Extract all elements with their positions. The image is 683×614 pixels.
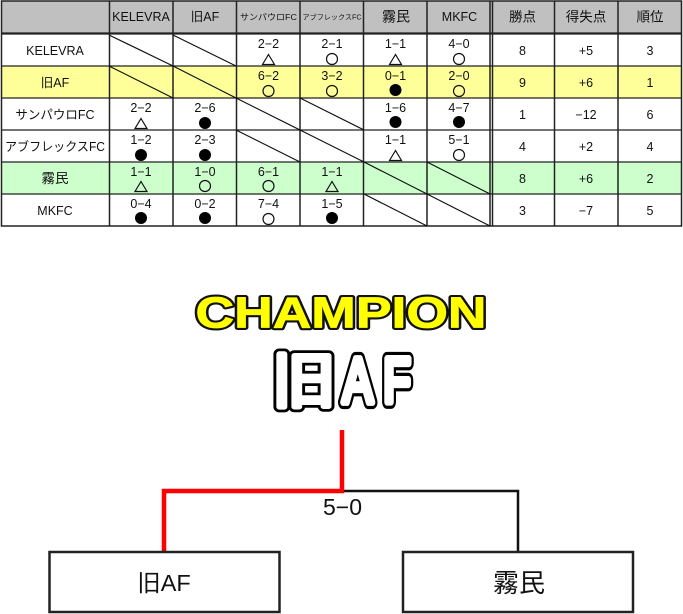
row: 霧民: 1−1 <box>130 165 152 179</box>
row: 霧民: 2 <box>647 172 654 186</box>
league table <box>1 1 682 226</box>
row: サンパウロFC: 1 <box>519 108 526 122</box>
row: サンパウロFC: サンパウロFC <box>15 108 95 122</box>
champion team name: AF <box>343 344 411 416</box>
row: アブフレックスFC: 1−2 <box>130 133 152 147</box>
row: 霧民: 6−1 <box>258 165 279 179</box>
row: MKFC: −7 <box>579 204 593 218</box>
row: MKFC: 0−2 <box>194 197 216 211</box>
row: 霧民: 1−0 <box>194 165 216 179</box>
highlight band: 霧民 row <box>1 162 682 194</box>
row: 霧民: 1−1 <box>321 165 343 179</box>
highlight band: 旧AF row <box>1 66 682 98</box>
row: 旧AF: +6 <box>579 76 593 90</box>
row: MKFC: 1−5 <box>321 197 343 211</box>
table header row: アブフレックスFC <box>302 12 362 22</box>
finalist box: 霧民 <box>403 552 633 612</box>
bracket: losing path <box>342 491 518 552</box>
table header row: MKFC <box>442 10 477 24</box>
row: KELEVRA: 3 <box>647 44 654 58</box>
row: アブフレックスFC <box>5 133 654 161</box>
row: KELEVRA: KELEVRA <box>26 44 84 58</box>
table header row: 旧AF <box>191 10 220 24</box>
row: KELEVRA: 8 <box>519 44 526 58</box>
row: 旧AF <box>41 69 654 96</box>
final score: 5−0 <box>323 494 362 520</box>
diagonal no-match cells <box>109 35 490 226</box>
title: CHAMPION: CHAMPION <box>196 288 486 338</box>
row: 霧民 <box>42 165 654 192</box>
row: MKFC: MKFC <box>37 204 73 218</box>
row: 旧AF: 旧AF <box>41 76 70 90</box>
row: 旧AF: 3−2 <box>321 69 343 83</box>
row: KELEVRA: +5 <box>579 44 593 58</box>
row: KELEVRA: 1−1 <box>385 37 406 51</box>
table header row: サンパウロFC <box>240 12 297 22</box>
table grid lines <box>1 1 682 226</box>
row: アブフレックスFC: 2−3 <box>194 133 216 147</box>
row: MKFC: 3 <box>519 204 526 218</box>
row: アブフレックスFC: 5−1 <box>448 133 470 147</box>
row: 旧AF: 9 <box>519 76 526 90</box>
row: 旧AF: 2−0 <box>448 69 470 83</box>
row: サンパウロFC: 2−6 <box>194 101 216 115</box>
row: MKFC: 7−4 <box>258 197 279 211</box>
row: アブフレックスFC: 1−1 <box>385 133 406 147</box>
finalist box: 旧AF <box>50 552 280 612</box>
title: CHAMPION: CHAMPION <box>196 288 486 338</box>
row: サンパウロFC: −12 <box>575 108 597 122</box>
row: MKFC: 0−4 <box>130 197 152 211</box>
row: 霧民: +6 <box>579 172 593 186</box>
row: 旧AF: 6−2 <box>258 69 279 83</box>
champion team name: 旧 <box>272 349 336 416</box>
row: アブフレックスFC: 4 <box>519 140 526 154</box>
row: アブフレックスFC: +2 <box>579 140 593 154</box>
row: サンパウロFC: 4−7 <box>448 101 470 115</box>
row: KELEVRA: 2−2 <box>258 37 279 51</box>
row: サンパウロFC <box>15 101 654 129</box>
table header row: 勝点 <box>509 10 536 24</box>
champion team name: AF <box>343 344 411 416</box>
row: サンパウロFC: 1−6 <box>385 101 406 115</box>
table header row: KELEVRA <box>112 10 170 24</box>
row: サンパウロFC: 6 <box>647 108 654 122</box>
champion team name: 旧 <box>272 349 336 416</box>
row: KELEVRA <box>26 37 654 64</box>
row: 霧民: 霧民 <box>42 171 69 186</box>
row: サンパウロFC: 2−2 <box>130 101 152 115</box>
row: 霧民: 8 <box>519 172 526 186</box>
champion team name <box>272 344 411 416</box>
bracket: winning path <box>164 430 342 552</box>
table header row: 得失点 <box>566 8 606 24</box>
row: 旧AF: 0−1 <box>385 69 406 83</box>
table header row: 順位 <box>636 10 664 24</box>
row: アブフレックスFC: アブフレックスFC <box>5 139 105 154</box>
finalist box: 旧AF: 旧AF <box>137 570 191 596</box>
table header row: 霧民 <box>382 8 410 24</box>
row: 旧AF: 1 <box>647 76 654 90</box>
row: KELEVRA: 2−1 <box>321 37 343 51</box>
row: MKFC: 5 <box>647 204 654 218</box>
row: MKFC <box>37 197 654 224</box>
row: KELEVRA: 4−0 <box>448 37 470 51</box>
row: アブフレックスFC: 4 <box>647 140 654 154</box>
table header row <box>1 1 682 33</box>
finalist box: 霧民: 霧民 <box>493 568 545 598</box>
